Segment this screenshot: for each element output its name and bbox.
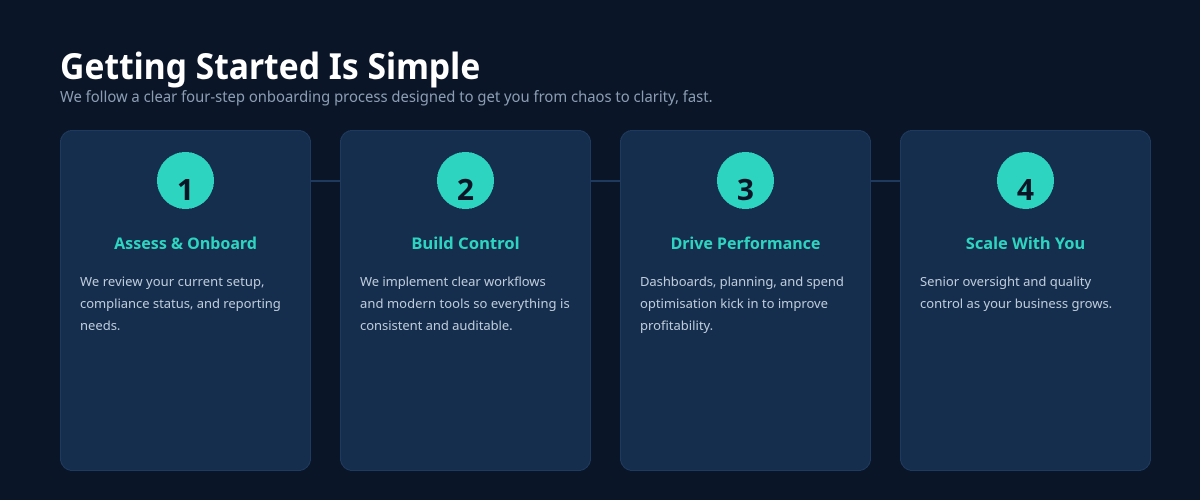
heading: Drive Performance: Drive Performance — [671, 232, 820, 254]
connector: step 3 to 4 — [871, 180, 900, 182]
text: step 3 description: Dashboards, planning, and spend — [640, 272, 844, 290]
text: step 4 description: control as your business grows. — [920, 294, 1112, 312]
text: step 2 description: We implement clear workflows — [360, 272, 546, 290]
number badge 2 — [437, 152, 494, 209]
connector: step 1 to 2 — [311, 180, 340, 182]
heading: Assess & Onboard: Assess & Onboard — [114, 232, 257, 254]
title: Getting Started Is Simple — [60, 41, 480, 90]
text: step 2 description: and modern tools so everything is — [360, 294, 570, 312]
text: step 2 description — [360, 272, 570, 334]
panel: step 4 — [900, 130, 1151, 471]
text: step 1 description: needs. — [80, 316, 120, 334]
number badge 3 — [717, 152, 774, 209]
text: step 1 description — [80, 272, 281, 334]
panel: step 1 — [60, 130, 311, 471]
panel: step 2 — [340, 130, 591, 471]
text: step 1 description: compliance status, and reporting — [80, 294, 281, 312]
text: step 1 description: We review your current setup, — [80, 272, 265, 290]
number badge 1 — [157, 152, 214, 209]
panel: step 3 — [620, 130, 871, 471]
heading: Build Control: Build Control — [411, 232, 520, 254]
connector: step 2 to 3 — [591, 180, 620, 182]
number badge 4: 4 — [1017, 168, 1034, 209]
number badge 3: 3 — [737, 168, 754, 209]
text: step 4 description: Senior oversight and quality — [920, 272, 1091, 290]
text: step 4 description — [920, 272, 1112, 312]
number badge 4 — [997, 152, 1054, 209]
heading: Scale With You: Scale With You — [966, 232, 1085, 254]
subtitle: We follow a clear four-step onboarding process designed to get you from chaos to clarity, fast. — [60, 87, 713, 107]
text: step 3 description — [640, 272, 844, 334]
text: step 3 description: optimisation kick in to improve — [640, 294, 828, 312]
text: step 3 description: profitability. — [640, 316, 713, 334]
number badge 2: 2 — [457, 168, 474, 209]
text: step 2 description: consistent and auditable. — [360, 316, 513, 334]
number badge 1: 1 — [177, 168, 194, 209]
